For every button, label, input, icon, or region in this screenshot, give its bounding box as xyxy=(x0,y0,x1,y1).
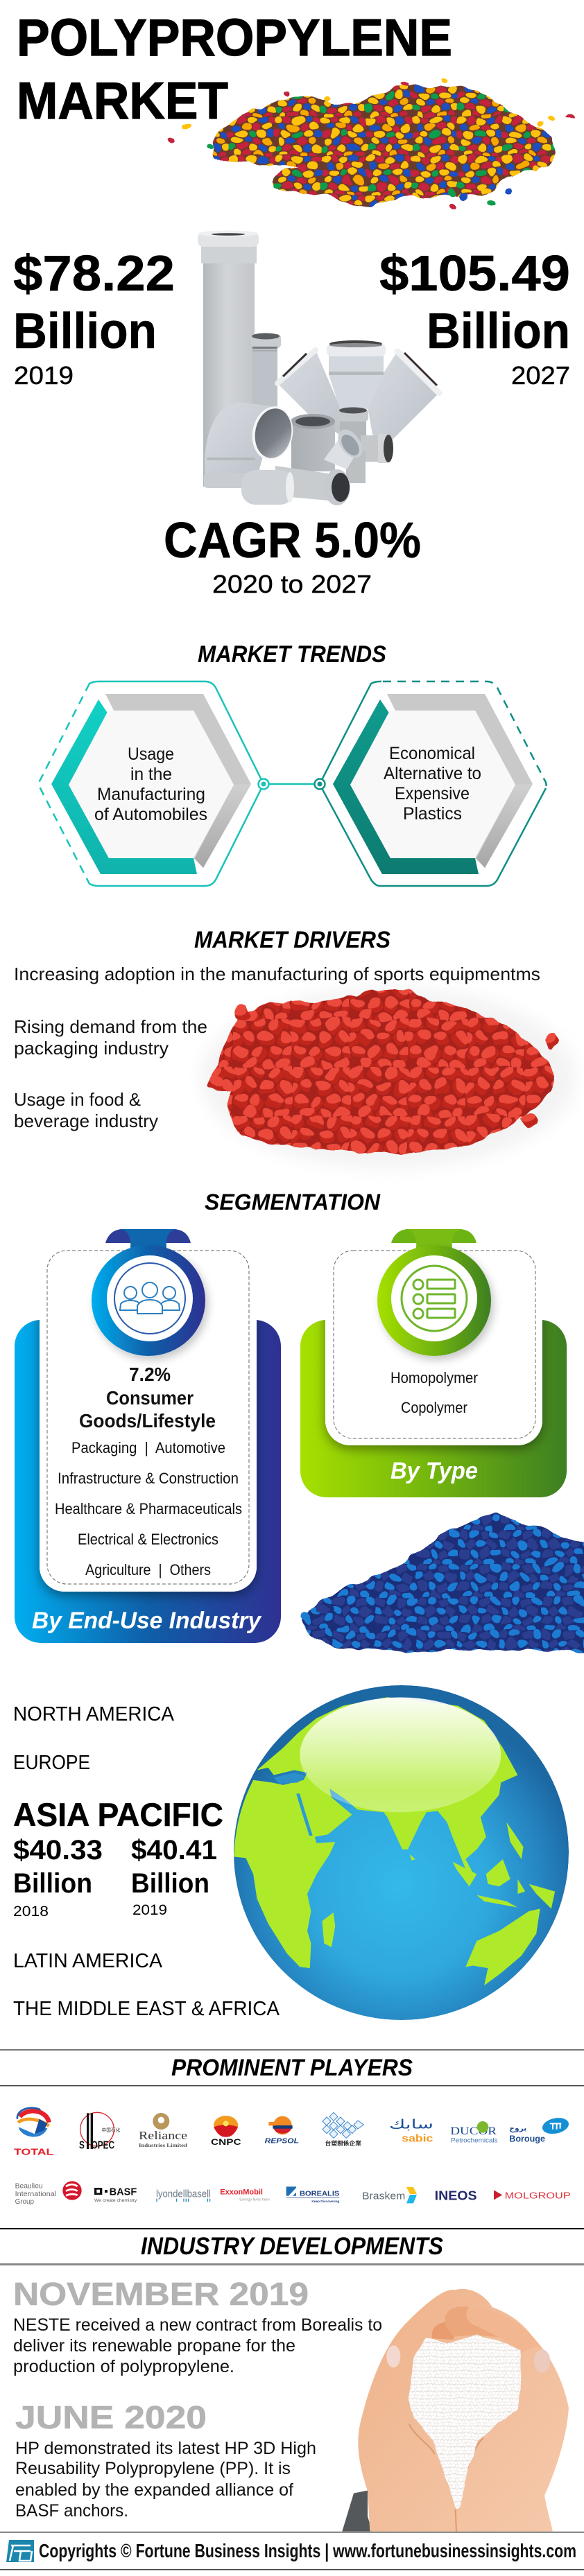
logo: Borealis: Keep Discovering xyxy=(311,2200,339,2203)
panel: market trend 1 xyxy=(39,681,264,886)
segment text: end-use: Infrastructure & Construction xyxy=(58,1470,239,1487)
development: June 2020: JUNE 2020 xyxy=(15,2399,207,2435)
segment text: type: Copolymer xyxy=(401,1399,467,1416)
panel: market trend 2: Economical xyxy=(389,744,475,763)
development: June 2020: HP demonstrated its latest HP 3D High xyxy=(15,2439,316,2458)
seas xyxy=(298,1793,311,1836)
logo: Braskem: Braskem xyxy=(362,2191,405,2202)
image: globe xyxy=(234,1685,569,2020)
list: market drivers text: beverage industry xyxy=(14,1111,158,1131)
heading: industry developments: INDUSTRY DEVELOPMENTS xyxy=(141,2233,443,2260)
logo: CNPC xyxy=(211,2116,241,2147)
title xyxy=(17,8,452,130)
image: red plastic pellets xyxy=(201,988,576,1168)
logo: Borealis: BOREALIS xyxy=(300,2190,340,2198)
logo: SABIC xyxy=(389,2118,433,2144)
logos: left half xyxy=(14,2108,299,2206)
list: market drivers text xyxy=(14,964,540,1131)
title: MARKET xyxy=(17,71,228,130)
stat: 2027 market size: $105.49 xyxy=(379,246,570,302)
logo: Ducor: Petrochemicals xyxy=(451,2137,498,2144)
development: November 2019: NOVEMBER 2019 xyxy=(13,2276,309,2312)
logo: Reliance: Reliance xyxy=(139,2129,187,2142)
segment text: end-use: Packaging | Automotive xyxy=(71,1439,225,1456)
image: colourful plastic pellets xyxy=(167,78,575,209)
logo: Repsol: REPSOL xyxy=(265,2137,299,2145)
logo: Reliance: Industries Limited xyxy=(139,2143,187,2148)
development: June 2020: Reusability Polypropylene (PP). It is xyxy=(15,2459,291,2478)
list: regions xyxy=(13,1703,280,2020)
stat: CAGR: 2020 to 2027 xyxy=(212,570,372,598)
development: June 2020 xyxy=(15,2399,316,2521)
logo: Borealis xyxy=(286,2186,340,2203)
panel label: by end-use industry: By End-Use Industry xyxy=(32,1608,262,1634)
logo: Borouge: بروج xyxy=(509,2123,526,2133)
logo: Sinopec: 中国石化 xyxy=(102,2126,121,2133)
logo: Beaulieu xyxy=(15,2181,82,2206)
segment text: end-use: Healthcare & Pharmaceuticals xyxy=(55,1500,242,1517)
logo: BASF: BASF xyxy=(110,2187,137,2198)
logo: Formosa Plastics: 台塑關係企業 xyxy=(325,2139,361,2147)
logo: SABIC: سابك xyxy=(389,2118,433,2132)
stat: 2019 market size xyxy=(13,246,175,390)
stat: 2019 market size: 2019 xyxy=(14,361,74,390)
logo: Beaulieu: Group xyxy=(15,2198,34,2206)
stat: 2027 market size: 2027 xyxy=(511,361,570,390)
logo: ExxonMobil xyxy=(220,2188,270,2202)
title: POLYPROPYLENE xyxy=(17,8,452,67)
list: regions: Billion xyxy=(13,1868,92,1899)
panel: market trend 1: Usage xyxy=(128,745,174,764)
stat: CAGR xyxy=(164,513,421,598)
stat: 2019 market size: $78.22 xyxy=(13,246,175,302)
logo: LyondellBasell: lyondellbasell xyxy=(156,2188,211,2200)
list: regions: $40.33 xyxy=(13,1835,103,1865)
logo: Sinopec: S OPEC xyxy=(79,2139,114,2151)
list: regions: 2019 xyxy=(132,1902,167,1918)
land masses xyxy=(234,1697,555,1985)
logo: ExxonMobil: ExxonMobil xyxy=(220,2188,263,2197)
connector between trends xyxy=(258,779,325,789)
heading: segmentation: SEGMENTATION xyxy=(205,1190,381,1215)
panel: market trend 1: of Automobiles xyxy=(94,805,207,824)
logo: Repsol xyxy=(265,2116,299,2145)
list: market drivers text: Usage in food & xyxy=(14,1089,141,1110)
logo: INEOS: INEOS xyxy=(435,2188,477,2202)
heading: market drivers: MARKET DRIVERS xyxy=(194,927,390,953)
heading: market trends: MARKET TRENDS xyxy=(198,641,386,668)
logo: ExxonMobil: Energy lives here xyxy=(239,2198,270,2202)
panel: market trend 2: Plastics xyxy=(403,804,462,824)
logo: Braskem xyxy=(362,2187,417,2203)
logo: Beaulieu: Beaulieu xyxy=(15,2183,43,2191)
list: regions: EUROPE xyxy=(13,1752,90,1774)
logo: SABIC: sabic xyxy=(402,2133,433,2144)
stat: 2027 market size: Billion xyxy=(427,304,570,359)
logos: right half xyxy=(286,2112,571,2203)
image: grey plastic pipes xyxy=(198,230,439,505)
list: regions: THE MIDDLE EAST & AFRICA xyxy=(13,1998,280,2020)
stat: CAGR: CAGR 5.0% xyxy=(164,513,421,568)
list: regions: NORTH AMERICA xyxy=(13,1703,175,1725)
panel: market trend 2: Alternative to xyxy=(384,764,481,783)
logo: Total xyxy=(14,2108,54,2157)
logo: Borouge xyxy=(509,2116,570,2143)
segment text: end-use: Consumer xyxy=(106,1387,194,1409)
medal icon: list xyxy=(377,1229,491,1356)
heading: prominent players: PROMINENT PLAYERS xyxy=(171,2055,413,2081)
development: November 2019: NESTE received a new contract from Borealis to xyxy=(13,2315,382,2335)
list: market drivers text: packaging industry xyxy=(14,1038,169,1059)
logo: BASF: We create chemistry xyxy=(94,2198,137,2203)
logo: CNPC: CNPC xyxy=(211,2137,241,2147)
logo: Sinopec xyxy=(79,2112,121,2151)
list: regions: Billion xyxy=(131,1868,209,1899)
segment text: type xyxy=(390,1369,478,1416)
panel: market trend 2: Expensive xyxy=(395,784,470,803)
logo: Borouge: Borouge xyxy=(509,2133,545,2143)
list: regions: 2018 xyxy=(13,1904,49,1920)
panel: market trend 2 xyxy=(322,681,547,886)
segment text: end-use: Agriculture | Others xyxy=(85,1561,211,1578)
segment text: type: Homopolymer xyxy=(390,1369,478,1386)
list: regions: LATIN AMERICA xyxy=(13,1950,163,1972)
gloss highlight xyxy=(300,1698,501,1812)
segment text: end-use: Electrical & Electronics xyxy=(78,1531,218,1548)
list: market drivers text: Increasing adoption in the manufacturing of sports equipmentms xyxy=(14,964,540,984)
logo: MOL Group: MOLGROUP xyxy=(505,2190,571,2200)
list: regions: $40.41 xyxy=(131,1835,217,1865)
list: market drivers text: Rising demand from the xyxy=(14,1016,207,1037)
medal icon: people xyxy=(92,1229,205,1356)
panel: market trend 1: in the xyxy=(130,765,172,784)
logo: Total: TOTAL xyxy=(14,2148,54,2157)
footer: logo xyxy=(6,2540,34,2562)
development: November 2019: production of polypropylene. xyxy=(13,2357,234,2376)
panel: market trend 1: Manufacturing xyxy=(97,785,205,804)
logo: Ducor: DUCOR xyxy=(450,2125,497,2137)
development: June 2020: enabled by the expanded alliance of xyxy=(15,2480,293,2500)
segment text: end-use: Goods/Lifestyle xyxy=(79,1410,216,1431)
list: regions: ASIA PACIFIC xyxy=(13,1796,223,1833)
image: hands holding white pellets xyxy=(342,2289,569,2532)
panel label: by type: By Type xyxy=(390,1458,478,1484)
panel: by type xyxy=(300,1229,567,1497)
stat: 2027 market size xyxy=(379,246,570,390)
development: November 2019: deliver its renewable propane for the xyxy=(13,2336,295,2356)
image: blue plastic pellets xyxy=(299,1514,584,1652)
logo: Beaulieu: International xyxy=(15,2191,56,2198)
logo: Reliance xyxy=(139,2113,187,2148)
logo: BASF xyxy=(94,2187,137,2203)
segment text: end-use xyxy=(55,1364,242,1578)
panel: by end-use industry xyxy=(15,1229,281,1643)
stat: 2019 market size: Billion xyxy=(13,304,157,359)
development: June 2020: BASF anchors. xyxy=(15,2501,128,2521)
segment text: end-use: 7.2% xyxy=(129,1364,171,1385)
development: November 2019 xyxy=(13,2276,382,2376)
logo: Ducor xyxy=(450,2121,498,2144)
logo: Formosa Plastics xyxy=(323,2112,363,2147)
